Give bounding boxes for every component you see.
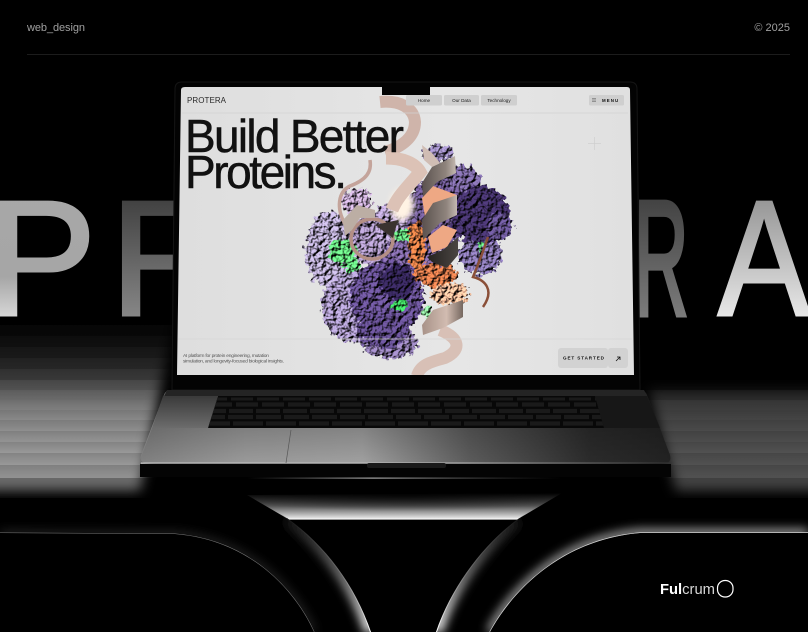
screen description text: AI platform for protein engineering, mutation: [183, 353, 269, 359]
nav pill: Technology: Technology: [487, 98, 511, 103]
logo: Fulcrum: Fulcrum: [660, 581, 715, 598]
left striped light panel: [0, 336, 170, 498]
green glow regions: [329, 229, 484, 318]
dark ribbon tip: [375, 220, 398, 238]
center glow trapezoid under laptop: [247, 478, 562, 519]
laptop lid: [172, 82, 640, 390]
large wordmark behind laptop: [0, 167, 808, 351]
screen description text: simulation, and longevity-focused biological insights.: [183, 358, 284, 364]
laptop screen: [177, 87, 634, 375]
headline: Build Better: [185, 110, 404, 162]
site logo: Protera: PROTERA: [187, 96, 227, 105]
right arch rim light: [436, 519, 808, 632]
large wordmark behind laptop: R: [634, 167, 688, 351]
left arch rim light: [0, 518, 371, 632]
core highlight: [390, 189, 414, 221]
laptop base deck: [139, 390, 672, 477]
get started button: GET STARTED: [563, 356, 605, 360]
helix bands: [422, 145, 463, 335]
protein illustration: [305, 102, 513, 376]
icon: plus mark: [588, 137, 601, 150]
menu button: MENU: [602, 98, 619, 103]
get started button: [558, 348, 608, 368]
protein surface clusters: [305, 144, 513, 359]
orange core: [408, 221, 470, 305]
nav pill: Technology: [481, 95, 517, 106]
laptop: [139, 82, 672, 477]
laptop keyboard: [200, 396, 610, 428]
large wordmark behind laptop: E: [510, 167, 619, 350]
nav pill: Home: [406, 95, 442, 106]
nav pill: Our Data: [444, 95, 479, 106]
menu button: [589, 95, 624, 106]
nav pill: Our Data: Our Data: [452, 98, 471, 103]
headline: [185, 110, 404, 198]
large wordmark behind laptop: A: [718, 168, 808, 351]
right striped light panel: [646, 387, 808, 497]
large wordmark behind laptop: O: [260, 167, 388, 350]
arrow button: [608, 348, 628, 368]
large wordmark behind laptop: T: [390, 167, 490, 350]
nav pill: Home: Home: [418, 98, 431, 103]
header label: copyright year: © 2025: [754, 22, 790, 34]
screen description text: [183, 353, 284, 364]
ribbons: [339, 102, 488, 376]
headline: Proteins.: [185, 146, 347, 198]
large wordmark behind laptop: R: [110, 167, 228, 350]
screen notch: [382, 87, 430, 95]
left coil band: [343, 205, 375, 236]
helix peach inner faces: [422, 186, 457, 253]
header label: web_design: web_design: [26, 22, 85, 34]
